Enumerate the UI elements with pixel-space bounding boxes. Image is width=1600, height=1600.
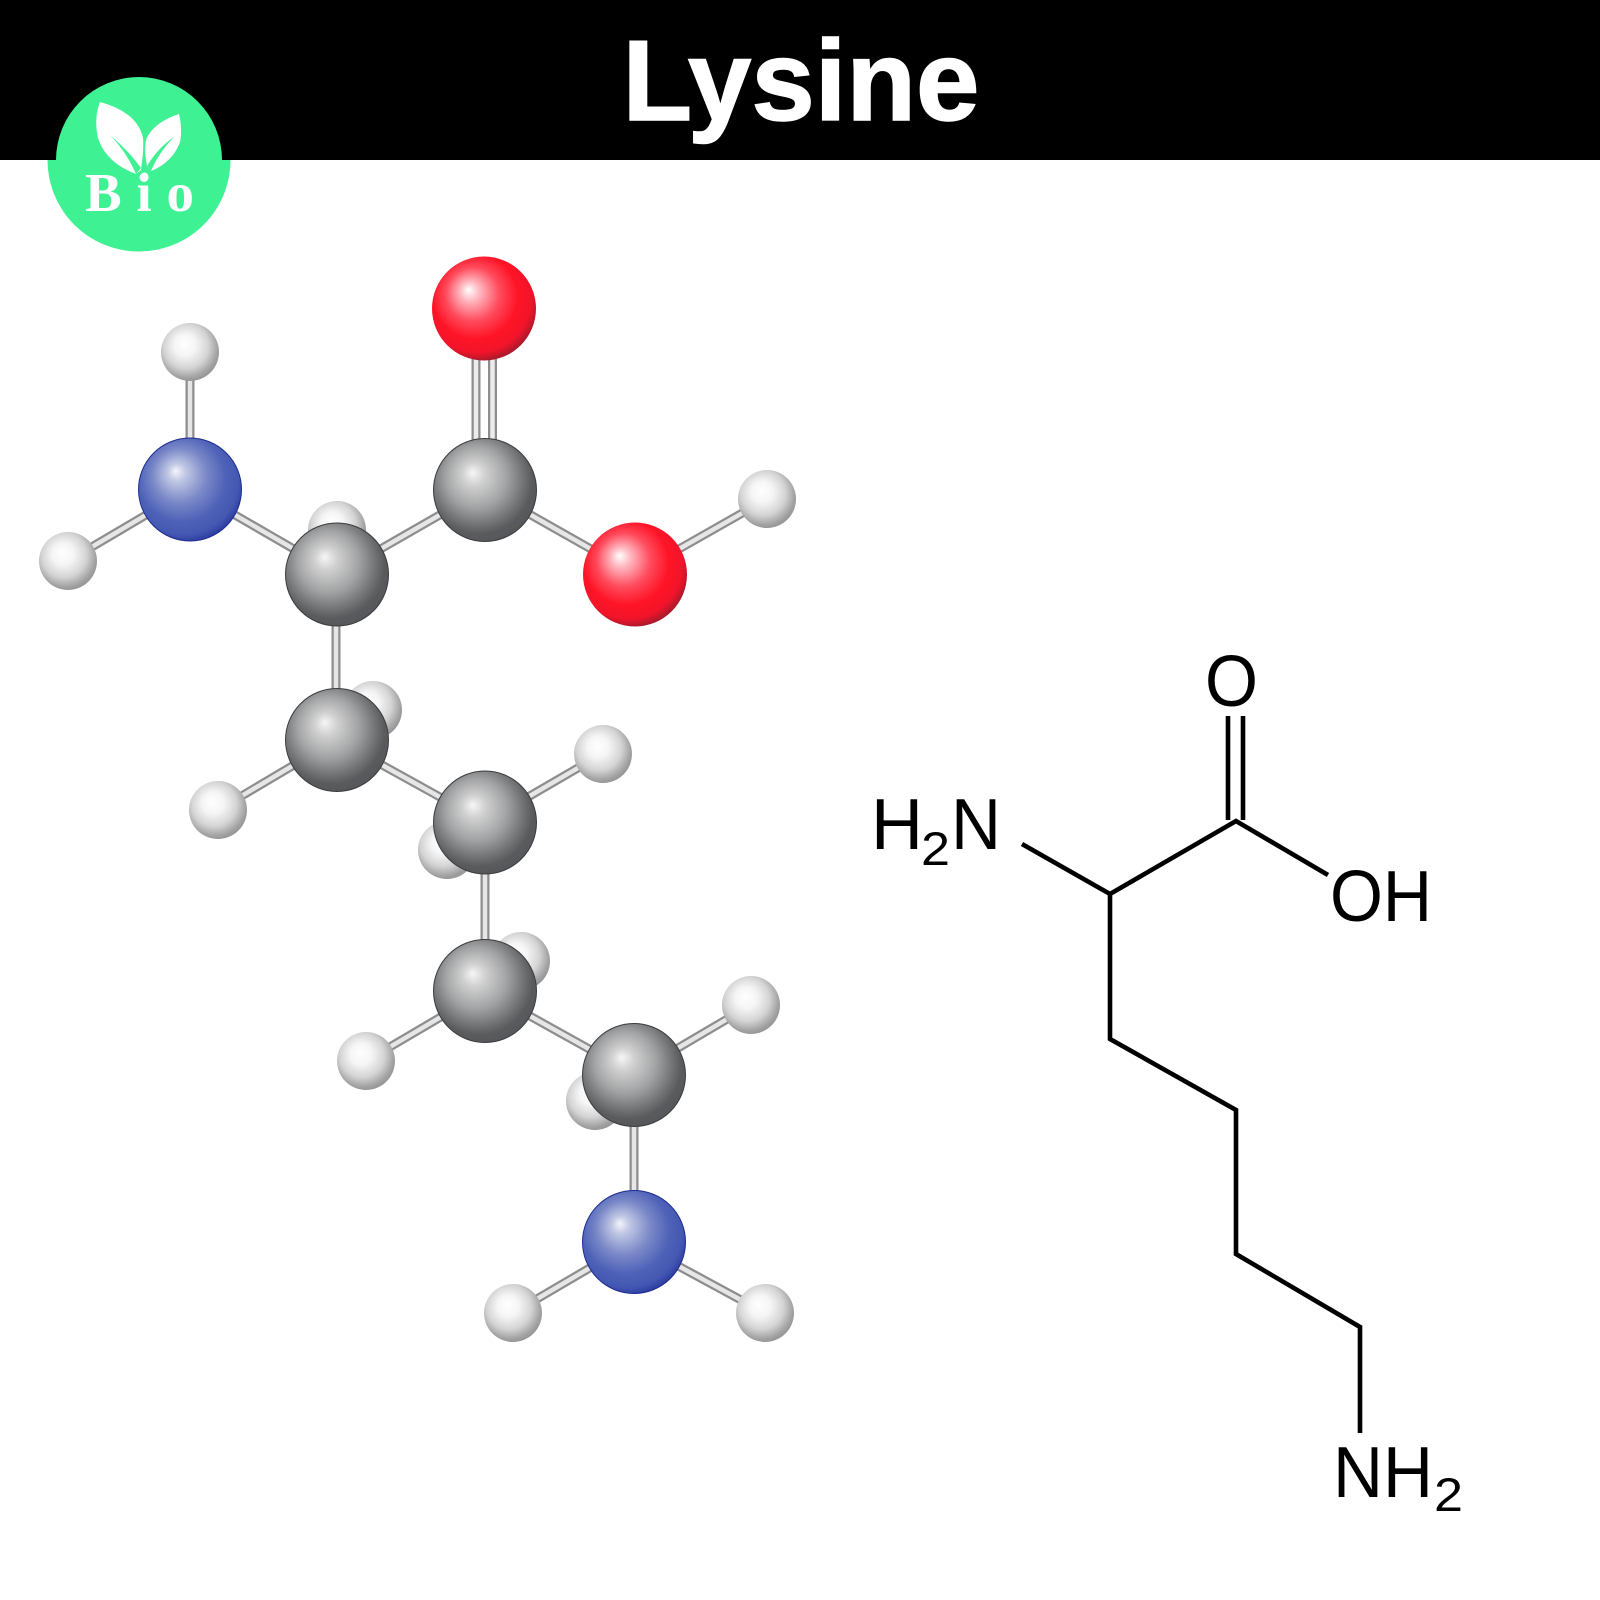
label: H2N subscript: 2 — [921, 822, 950, 875]
badge text: B — [85, 162, 122, 223]
double bond — [476, 350, 492, 440]
badge text: o — [166, 162, 194, 223]
bonds — [68, 351, 767, 1313]
nitrogen atoms — [138, 438, 686, 1294]
title banner — [0, 0, 1600, 160]
label: OH: OH — [1330, 857, 1432, 937]
label: NH2: NH — [1333, 1433, 1433, 1513]
skeletal structural formula — [871, 642, 1463, 1521]
badge disc — [48, 77, 230, 251]
letter i dot — [140, 173, 148, 182]
label: H2N: H — [871, 785, 923, 865]
icon: leaves — [96, 102, 181, 174]
carbon atoms — [286, 438, 686, 1126]
hidden hydrogen atoms behind carbons — [308, 501, 624, 1130]
label: NH2 subscript: 2 — [1434, 1468, 1463, 1521]
badge text: i — [136, 162, 152, 223]
label: H2N nitrogen: N — [951, 785, 1001, 865]
badge: Bio logo — [48, 77, 230, 251]
label: O: O — [1205, 642, 1258, 722]
3D ball-and-stick model — [39, 256, 796, 1342]
title: Lysine — [623, 18, 979, 145]
hydrogen atoms — [39, 323, 796, 1342]
oxygen atoms — [432, 256, 687, 626]
skeleton bonds — [1022, 716, 1360, 1433]
